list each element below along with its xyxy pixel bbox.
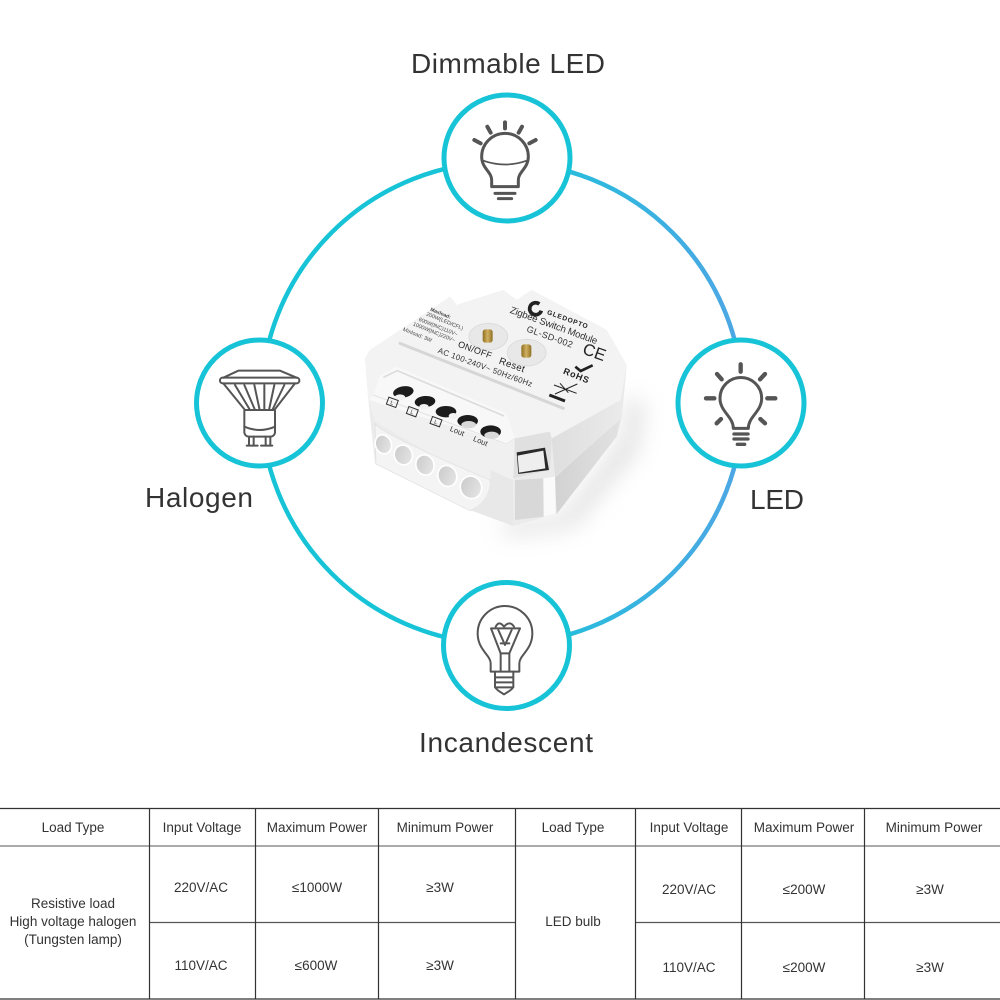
device body xyxy=(365,290,627,526)
left table header: Minimum Power xyxy=(397,820,494,835)
device texts: Reset xyxy=(497,356,526,375)
slot line xyxy=(400,343,563,408)
device texts: GL-SD-002 xyxy=(525,324,574,350)
heading: Dimmable LED: Dimmable LED xyxy=(411,48,605,79)
device texts: AC 100-240V~ 50Hz/60Hz xyxy=(437,346,534,389)
device texts: GLEDOPTO xyxy=(546,309,588,330)
specification table xyxy=(0,808,1000,999)
icon circle: halogen xyxy=(196,340,322,466)
icon: halogen spot xyxy=(220,371,299,446)
product: switch module xyxy=(365,290,643,535)
side clip xyxy=(513,432,556,520)
table grid xyxy=(0,808,1000,999)
buttons xyxy=(469,323,508,350)
left table body: ≥3W xyxy=(426,880,454,895)
left table body: ≤1000W xyxy=(292,880,342,895)
right table header: Minimum Power xyxy=(886,820,983,835)
Gledopto logo xyxy=(530,303,541,315)
left table header xyxy=(42,820,494,835)
left table header: Load Type xyxy=(42,820,104,835)
right table body: ≥3W xyxy=(916,882,944,897)
icon circle: dimmable LED xyxy=(444,95,570,221)
front corner xyxy=(470,470,513,526)
RoHS tick and bin mark xyxy=(549,365,593,401)
heading: Incandescent: Incandescent xyxy=(419,727,593,758)
device texts: 200W(LED/CFL) xyxy=(425,312,464,332)
right table header: Input Voltage xyxy=(650,820,728,835)
right table body xyxy=(545,882,944,975)
device texts: Minload: 3W xyxy=(402,327,433,344)
device texts xyxy=(402,305,609,389)
terminal labels xyxy=(386,397,490,448)
front band xyxy=(368,400,515,526)
terminal labels: L xyxy=(409,410,414,416)
left table body: Resistive load xyxy=(31,896,115,911)
icon circle: LED xyxy=(678,340,804,466)
right table header xyxy=(542,820,983,835)
left table body: ≤600W xyxy=(295,958,338,973)
side lower band xyxy=(555,418,621,514)
device texts: Zigbee Switch Module xyxy=(508,305,599,347)
left table body: 110V/AC xyxy=(174,958,228,973)
icon circle: incandescent xyxy=(444,582,570,708)
right table body: ≤200W xyxy=(783,882,826,897)
left table body: ≥3W xyxy=(426,958,454,973)
terminal labels: L xyxy=(389,400,394,407)
terminal shelf xyxy=(368,367,515,444)
device texts: 1000W(INC)220V~ xyxy=(412,322,456,344)
connecting ring xyxy=(261,162,743,644)
device texts: RoHS xyxy=(562,366,590,385)
device texts: CE xyxy=(580,339,609,365)
right table body: ≤200W xyxy=(783,960,826,975)
wire entry holes xyxy=(373,433,485,502)
terminal labels: Lout xyxy=(472,434,490,448)
device texts: ON/OFF xyxy=(457,339,494,361)
left table body: High voltage halogen xyxy=(10,914,136,929)
device drawing xyxy=(365,290,627,526)
left table header: Maximum Power xyxy=(267,820,368,835)
right table header: Maximum Power xyxy=(754,820,855,835)
right table body: LED bulb xyxy=(545,914,601,929)
right table header: Load Type xyxy=(542,820,604,835)
left table body xyxy=(10,880,454,973)
icon: incandescent bulb xyxy=(478,606,532,694)
hole plate xyxy=(375,423,491,511)
terminal slots xyxy=(392,385,501,438)
icon: LED bulb xyxy=(706,364,775,444)
heading: Halogen: Halogen xyxy=(145,482,253,513)
device texts: 600W(INC)110V~ xyxy=(418,317,458,338)
side upper band xyxy=(552,365,627,477)
left table body: 220V/AC xyxy=(174,880,228,895)
right table body: 110V/AC xyxy=(662,960,716,975)
terminal labels: L xyxy=(433,420,438,426)
device texts: Maxload: xyxy=(429,307,452,321)
icon: dimmable bulb xyxy=(474,122,536,199)
left table header: Input Voltage xyxy=(163,820,241,835)
heading: LED: LED xyxy=(750,484,804,515)
device top face xyxy=(365,290,627,438)
right table body: 220V/AC xyxy=(662,882,716,897)
left table body: (Tungsten lamp) xyxy=(24,932,122,947)
device shadow xyxy=(497,397,643,535)
terminal labels: Lout xyxy=(449,424,467,438)
right table body: ≥3W xyxy=(916,960,944,975)
